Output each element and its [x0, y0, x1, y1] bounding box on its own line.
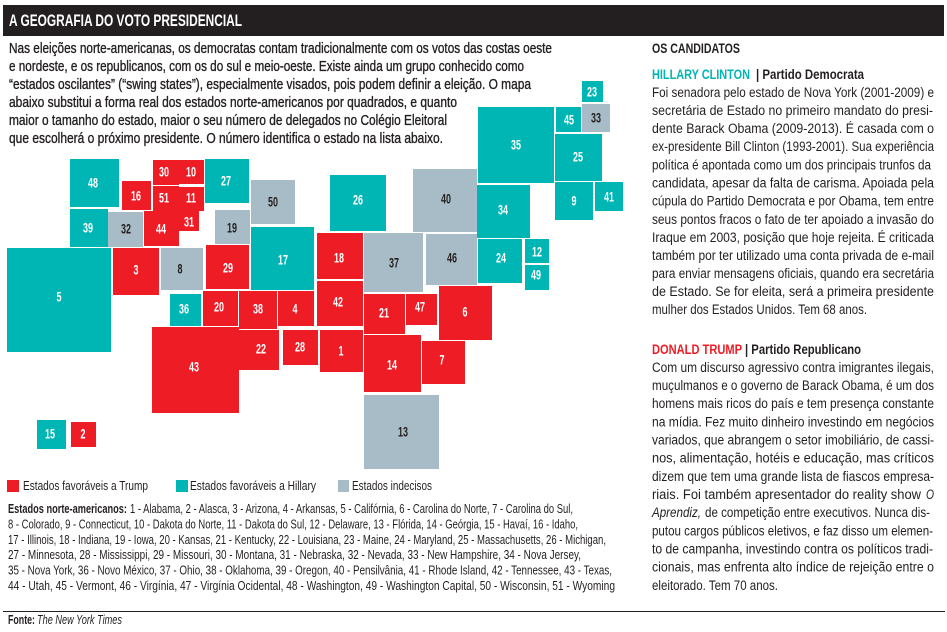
- Nevada: 32: [121, 222, 131, 236]
- Kansas: 20: [214, 300, 224, 314]
- Tennessee: [317, 281, 363, 326]
- Idaho: [122, 181, 151, 210]
- intro text: abaixo substitui a forma real dos estados norte-americanos por quadrados, e quanto: [9, 95, 457, 111]
- New York: 35: [511, 138, 521, 152]
- Indiana: [317, 233, 363, 279]
- Washington DC: [525, 265, 549, 290]
- Tennessee: 42: [333, 294, 343, 310]
- legend: undecided: Estados indecisos: [352, 478, 432, 493]
- Trump biography: eleitorado. Tem 70 anos.: [652, 578, 778, 594]
- Utah: 44: [156, 222, 166, 236]
- Delaware: [525, 239, 549, 263]
- Oklahoma: [239, 291, 277, 329]
- California: 5: [56, 290, 62, 304]
- Nebraska: 31: [184, 214, 194, 230]
- Nebraska: [179, 211, 199, 231]
- Delaware: 12: [532, 244, 542, 260]
- legend: [7, 478, 432, 493]
- list of states: [8, 501, 615, 593]
- New York: [478, 107, 554, 183]
- California: [7, 248, 111, 352]
- legend: undecided: [338, 478, 432, 493]
- Arkansas: 4: [292, 302, 298, 316]
- panel: Donald Trump: [651, 342, 934, 594]
- Missouri: [206, 245, 249, 289]
- Alabama: [320, 330, 363, 372]
- list of states: 44 - Utah, 45 - Vermont, 46 - Virgínia, 47 - Virgínia Ocidental, 48 - Washington, 49 - Washington Capital, 50 - Wisconsin, 51 - Wyoming: [8, 578, 615, 593]
- Florida: 13: [398, 424, 408, 440]
- Ohio: 37: [389, 256, 399, 270]
- Pennsylvania: [413, 169, 477, 232]
- list of states: 27 - Minnesota, 28 - Mississippi, 29 - Missouri, 30 - Montana, 31 - Nebraska, 32 - Nevada, 33 - New Hampshire, 34 - Nova Jersey,: [8, 547, 581, 562]
- South Carolina: 7: [440, 352, 444, 368]
- Trump heading: [652, 342, 861, 358]
- intro text: e nordeste, e os republicanos, com os do sul e meio-oeste. Existe ainda um grupo conhecido como: [9, 59, 524, 75]
- New Hampshire: 33: [591, 110, 601, 126]
- Idaho: 16: [131, 188, 141, 204]
- title bar: [3, 5, 944, 36]
- Hillary heading: HILLARY CLINTON: [652, 67, 750, 83]
- Missouri: 29: [223, 260, 233, 276]
- list of states: 17 - Illinois, 18 - Indiana, 19 - Iowa, 20 - Kansas, 21 - Kentucky, 22 - Louisiana, 23 - Maine, 24 - Maryland, 25 - Massachusetts, 26 - Michigan,: [8, 532, 606, 547]
- intro text: [9, 41, 552, 147]
- intro text: Nas eleições norte-americanas, os democratas contam tradicionalmente com os votos das costas oeste: [9, 41, 552, 57]
- Colorado: [161, 248, 203, 290]
- Oregon: 39: [83, 220, 93, 236]
- Illinois: 17: [278, 252, 288, 268]
- list of states: Estados norte-americanos:: [8, 501, 127, 516]
- Iowa: 19: [227, 220, 237, 236]
- Michigan: 26: [353, 192, 363, 208]
- Hawaii: [37, 420, 66, 449]
- Trump biography: Aprendiz,: [651, 505, 701, 521]
- Oregon: [70, 209, 108, 247]
- Pennsylvania: 40: [441, 192, 451, 206]
- Kentucky: [364, 294, 405, 334]
- Hawaii: 15: [45, 426, 55, 442]
- Texas: [152, 327, 239, 413]
- Alaska: [71, 422, 96, 447]
- Connecticut: [555, 182, 593, 220]
- Massachusetts: [555, 134, 602, 181]
- Nevada: [108, 212, 143, 247]
- Minnesota: 27: [221, 174, 231, 188]
- Washington: 48: [88, 176, 98, 190]
- list of states: 8 - Colorado, 9 - Connecticut, 10 - Dakota do Norte, 11 - Dakota do Sul, 12 - Delaware, 13 - Flórida, 14 - Geórgia, 15 - Havaí, 16 - Idaho,: [8, 516, 578, 532]
- tile map of states: [7, 81, 623, 469]
- Maryland: 24: [496, 250, 506, 266]
- Indiana: 18: [334, 250, 344, 266]
- Oklahoma: 38: [253, 302, 263, 316]
- North Dakota: 10: [186, 164, 196, 180]
- South Carolina: [422, 341, 465, 384]
- North Dakota: [179, 160, 204, 184]
- Vermont: [556, 107, 581, 132]
- Hillary heading: | Partido Democrata: [756, 67, 864, 83]
- Washington DC: 49: [531, 268, 541, 282]
- Trump biography: O: [926, 487, 934, 503]
- Georgia: [364, 335, 421, 392]
- Kentucky: 21: [379, 306, 389, 320]
- Colorado: 8: [178, 262, 183, 276]
- Arizona: 3: [134, 262, 139, 278]
- Maine: 23: [587, 84, 597, 100]
- Illinois: [251, 227, 314, 290]
- Wisconsin: [251, 180, 295, 224]
- Trump heading: DONALD TRUMP: [652, 342, 742, 358]
- Mississippi: [283, 330, 318, 365]
- panel: Hillary Clinton: [652, 67, 934, 318]
- Florida: [364, 395, 439, 469]
- North Carolina: 6: [462, 304, 468, 320]
- Virginia: [426, 234, 477, 285]
- Washington: [70, 159, 119, 207]
- legend: Hillary: Estados favoráveis a Hillary: [190, 478, 316, 493]
- North Carolina: [439, 286, 492, 340]
- Wisconsin: 50: [268, 194, 278, 210]
- Maine: [582, 81, 603, 102]
- Arkansas: [278, 291, 314, 326]
- candidates heading: OS CANDIDATOS: [652, 41, 740, 57]
- Connecticut: 9: [572, 194, 576, 208]
- New Jersey: 34: [498, 202, 508, 218]
- New Mexico: 36: [179, 302, 189, 316]
- Virginia: 46: [447, 250, 457, 266]
- source: The New York Times: [37, 612, 122, 627]
- Hillary biography: [652, 85, 934, 318]
- Montana: 30: [159, 164, 169, 180]
- Kansas: [203, 291, 238, 326]
- list of states: 35 - Nova York, 36 - Novo México, 37 - Ohio, 38 - Oklahoma, 39 - Oregon, 40 - Pensilvânia, 41 - Rhode Island, 42 - Tennessee, 43 - Texas,: [8, 562, 612, 578]
- South Dakota: 11: [186, 190, 196, 206]
- Utah: [144, 211, 179, 246]
- Wyoming: [153, 186, 179, 211]
- Trump biography: [651, 360, 934, 594]
- Mississippi: 28: [295, 340, 305, 354]
- intro text: maior o tamanho do estado, maior o seu número de delegados no Colégio Eleitoral: [9, 113, 447, 129]
- New Jersey: [477, 185, 530, 238]
- Ohio: [364, 233, 423, 292]
- Minnesota: [205, 159, 249, 203]
- Alaska: 2: [80, 426, 86, 442]
- list of states: 1 - Alabama, 2 - Alasca, 3 - Arizona, 4 - Arkansas, 5 - Califórnia, 6 - Carolina do Norte, 7 - Carolina do Sul,: [130, 501, 573, 516]
- West Virginia: 47: [415, 300, 425, 314]
- Michigan: [330, 175, 386, 231]
- Louisiana: [239, 330, 279, 370]
- Louisiana: 22: [256, 342, 266, 356]
- Vermont: 45: [564, 112, 574, 128]
- Montana: [153, 160, 179, 185]
- Trump biography: riais. Foi também apresentador do reality show: [652, 487, 922, 503]
- South Dakota: [179, 187, 204, 211]
- intro text: “estados oscilantes” (“swing states”), especialmente visados, pois podem definir a eleição. O mapa: [9, 77, 532, 93]
- Trump heading: | Partido Republicano: [745, 342, 861, 358]
- Iowa: [215, 210, 250, 244]
- legend: Trump: Estados favoráveis a Trump: [23, 478, 148, 493]
- Rhode Island: 41: [604, 190, 614, 204]
- Georgia: 14: [387, 358, 397, 372]
- Hillary biography: mulher dos Estados Unidos. Tem 68 anos.: [652, 302, 867, 318]
- Hillary heading: [652, 67, 864, 83]
- Texas: 43: [189, 360, 199, 374]
- Maryland: [478, 239, 522, 283]
- intro text: que escolherá o próximo presidente. O número identifica o estado na lista abaixo.: [9, 131, 443, 147]
- title bar: A GEOGRAFIA DO VOTO PRESIDENCIAL: [9, 11, 242, 30]
- New Mexico: [170, 294, 201, 326]
- Wyoming: 51: [159, 190, 169, 206]
- New Hampshire: [582, 104, 610, 132]
- Massachusetts: 25: [573, 150, 583, 164]
- Arizona: [113, 248, 159, 295]
- Alabama: 1: [338, 344, 344, 358]
- source: Fonte:: [8, 612, 35, 627]
- West Virginia: [406, 294, 437, 325]
- source: [8, 612, 122, 627]
- Rhode Island: [595, 182, 623, 211]
